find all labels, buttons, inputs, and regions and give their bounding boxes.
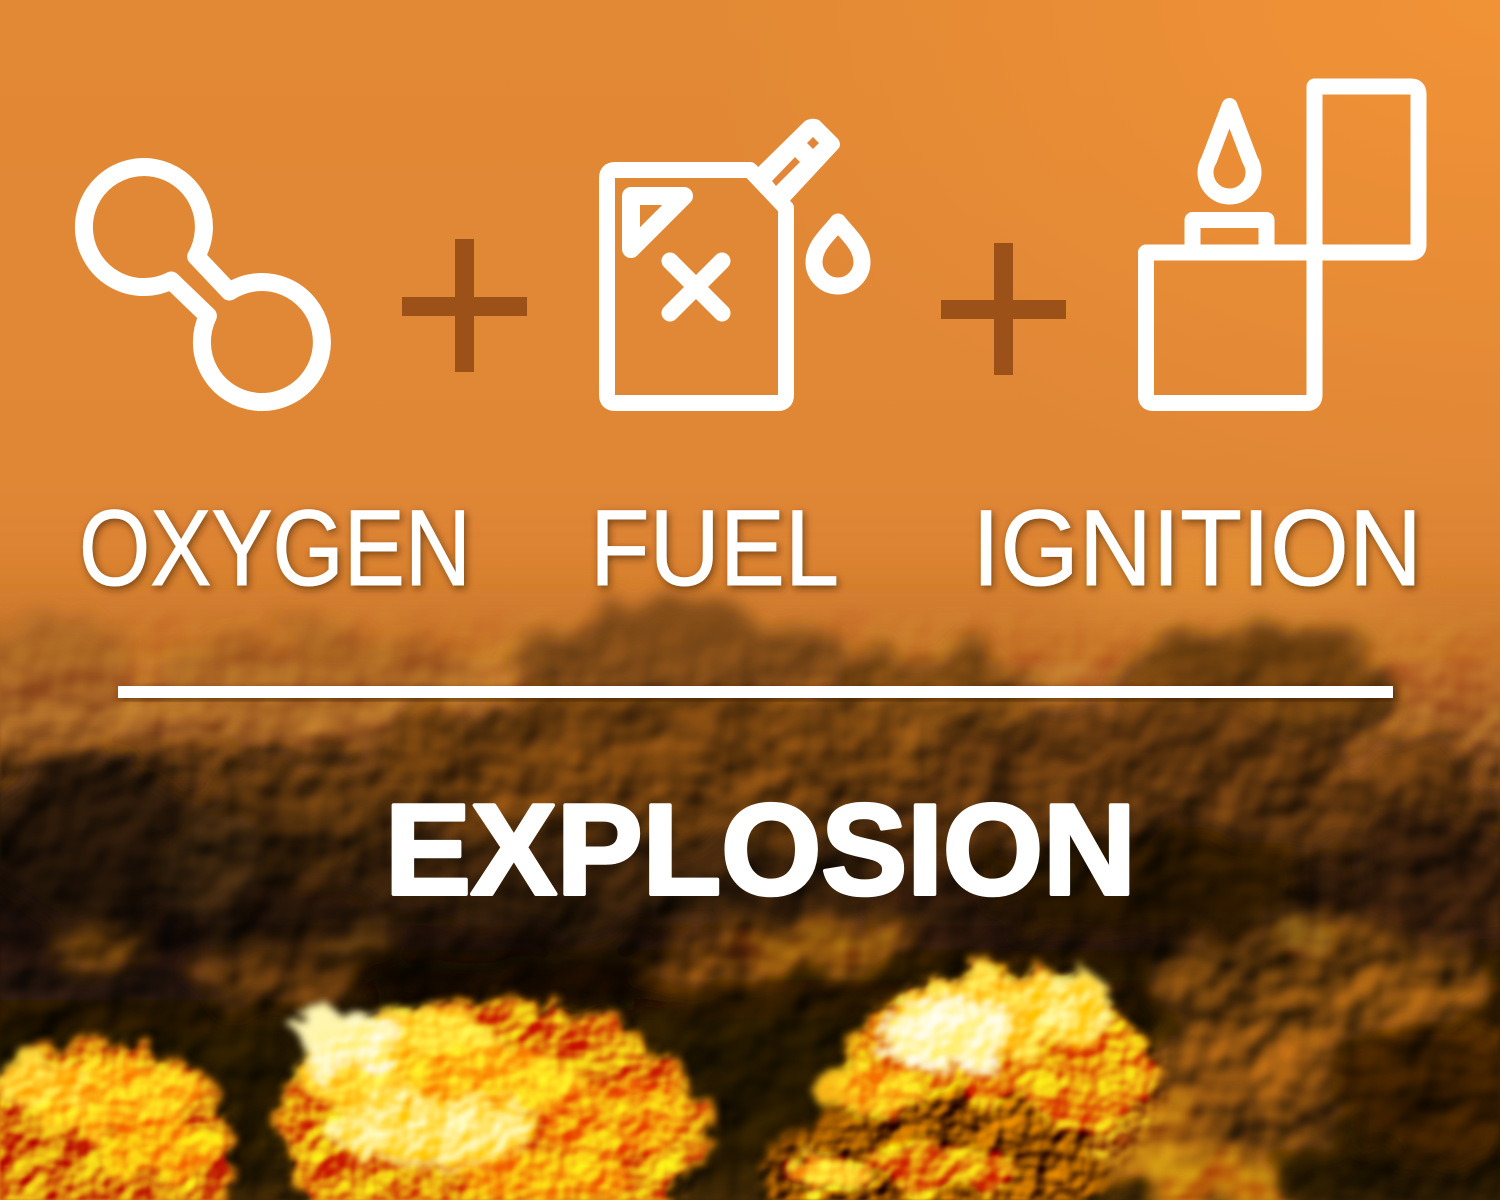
flame — [1206, 106, 1254, 196]
label: oxygen: OXYGEN — [79, 487, 471, 608]
can cap — [631, 196, 684, 249]
result heading: explosion: EXPLOSION — [385, 778, 1136, 922]
fire relief texture — [0, 954, 1170, 1200]
plus sign 2 — [941, 243, 1066, 375]
fuel drop — [814, 222, 862, 286]
lighter body — [1146, 252, 1314, 403]
label: fuel: FUEL — [590, 487, 839, 608]
icon: fuel can — [607, 119, 862, 403]
plus sign 1 — [402, 239, 527, 372]
cloud masses — [0, 602, 1500, 1200]
equals divider line — [118, 686, 1393, 698]
fireballs — [0, 965, 1150, 1200]
lighter lid — [1146, 86, 1418, 252]
lighter wick holder — [1192, 220, 1266, 250]
label: ignition: IGNITION — [972, 487, 1422, 608]
can body — [607, 170, 786, 403]
cloud shadow bands — [0, 775, 1500, 1200]
cloud relief texture — [0, 620, 1500, 1200]
icon: oxygen molecule — [84, 167, 322, 402]
can cross — [670, 261, 722, 313]
icon: lighter — [1146, 86, 1418, 403]
can spout — [750, 119, 840, 205]
